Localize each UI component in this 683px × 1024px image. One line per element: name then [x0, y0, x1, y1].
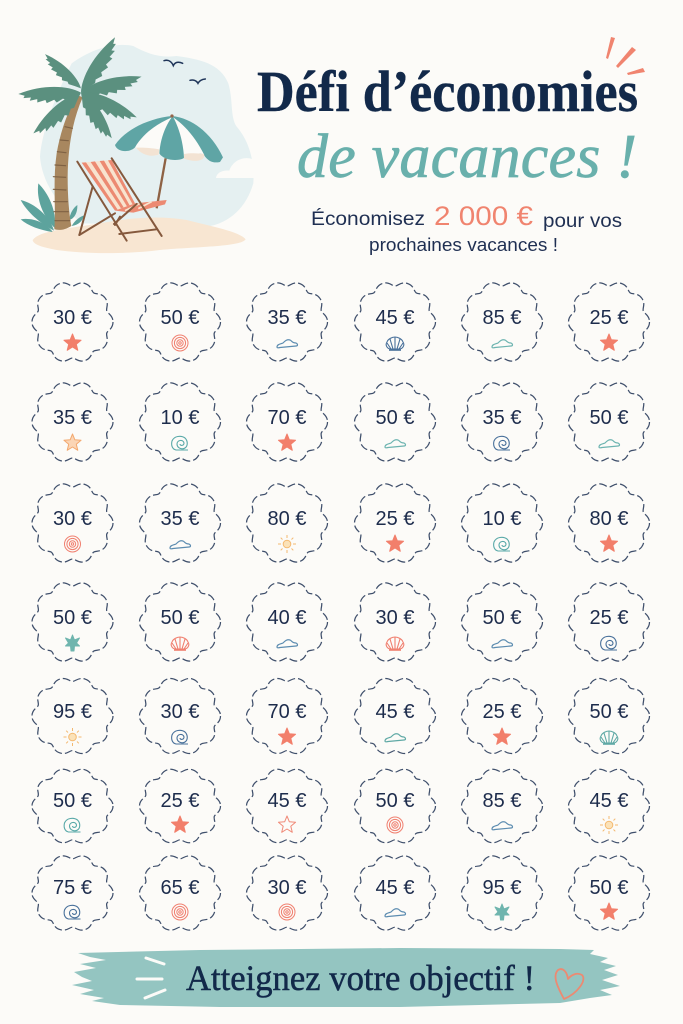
badge 10 €: 10 €	[483, 508, 521, 530]
badge 45 €	[354, 283, 436, 361]
badge 45 €: 45 €	[268, 790, 306, 812]
badge 10 €	[140, 383, 220, 461]
badge 25 €: 25 €	[590, 607, 628, 629]
subtitle	[311, 201, 622, 255]
badge 50 €	[140, 283, 220, 361]
badge 50 €	[354, 383, 436, 461]
icon: heart	[556, 969, 583, 999]
badge 45 €: 45 €	[376, 877, 414, 899]
badge 45 €	[246, 769, 328, 843]
umbrella pole	[157, 158, 166, 208]
badge 45 €: 45 €	[590, 790, 628, 812]
palm fronds	[18, 34, 144, 143]
badge 30 €	[354, 583, 436, 661]
badge 45 €	[354, 856, 436, 930]
sand	[33, 218, 246, 253]
savings grid	[32, 283, 650, 930]
badge 85 €: 85 €	[483, 307, 521, 329]
badge 25 €: 25 €	[590, 307, 628, 329]
badge 30 €: 30 €	[161, 701, 199, 723]
badge 85 €: 85 €	[483, 790, 521, 812]
badge 35 €	[32, 383, 113, 461]
badge 50 €: 50 €	[483, 607, 521, 629]
badge 80 €	[246, 484, 328, 562]
badge 25 €	[568, 583, 650, 661]
badge 25 €: 25 €	[483, 701, 521, 723]
badge 50 €	[462, 583, 542, 661]
badge 65 €: 65 €	[161, 877, 199, 899]
badge 50 €: 50 €	[161, 307, 199, 329]
badge 25 €	[462, 678, 542, 754]
sky blob	[40, 45, 254, 227]
badge 95 €	[32, 678, 113, 754]
badge 50 €	[568, 678, 650, 754]
badge 95 €: 95 €	[53, 701, 92, 723]
brush stroke	[72, 948, 620, 1007]
badge 85 €	[462, 769, 542, 843]
badge 30 €: 30 €	[53, 508, 92, 530]
badge 80 €: 80 €	[268, 508, 306, 530]
badge 95 €: 95 €	[483, 877, 521, 899]
badge 70 €	[246, 383, 328, 461]
subtitle line 2: prochaines vacances !	[369, 234, 558, 255]
badge 80 €: 80 €	[590, 508, 628, 530]
badge 50 €: 50 €	[590, 701, 628, 723]
badge 95 €	[462, 856, 542, 930]
badge 35 €: 35 €	[483, 407, 521, 429]
banner text: Atteignez votre objectif !	[186, 958, 535, 998]
badge 40 €	[246, 583, 328, 661]
title	[257, 59, 638, 191]
badge 35 €	[246, 283, 328, 361]
badge 50 €	[568, 383, 650, 461]
goal banner	[72, 948, 620, 1007]
subtitle word: Économisez	[311, 209, 425, 230]
badge 35 €: 35 €	[268, 307, 306, 329]
badge 25 €: 25 €	[376, 508, 414, 530]
badge 30 €: 30 €	[53, 307, 92, 329]
sparkle accent	[606, 37, 645, 75]
badge 50 €	[354, 769, 436, 843]
badge 10 €: 10 €	[161, 407, 199, 429]
badge 30 €	[246, 856, 328, 930]
badge 50 €: 50 €	[161, 607, 199, 629]
badge 45 €	[568, 769, 650, 843]
badge 45 €: 45 €	[376, 701, 414, 723]
badge 75 €	[32, 856, 113, 930]
badge 45 €: 45 €	[376, 307, 414, 329]
badge 50 €: 50 €	[53, 790, 92, 812]
deck chair	[77, 158, 167, 241]
badge 50 €	[568, 856, 650, 930]
badge 30 €	[32, 484, 113, 562]
heading line 2: de vacances !	[297, 123, 637, 191]
badge 50 €: 50 €	[590, 407, 628, 429]
white sparkle strokes	[137, 958, 165, 998]
badge 70 €: 70 €	[268, 701, 306, 723]
badge 35 €	[462, 383, 542, 461]
badge 50 €: 50 €	[590, 877, 628, 899]
badge 30 €	[32, 283, 113, 361]
badge 30 €: 30 €	[376, 607, 414, 629]
badge 30 €: 30 €	[268, 877, 306, 899]
badge 35 €: 35 €	[53, 407, 92, 429]
badge 80 €	[568, 484, 650, 562]
cloud	[216, 158, 254, 178]
badge 25 €	[354, 484, 436, 562]
badge 70 €: 70 €	[268, 407, 306, 429]
badge 10 €	[462, 484, 542, 562]
badge 75 €: 75 €	[53, 877, 92, 899]
subtitle word end: pour vos	[543, 211, 622, 232]
badge 40 €: 40 €	[268, 607, 306, 629]
badge 85 €	[462, 283, 542, 361]
badge 45 €	[354, 678, 436, 754]
badge 25 €: 25 €	[161, 790, 199, 812]
badge 50 €	[32, 769, 113, 843]
birds	[164, 60, 205, 83]
badge 35 €: 35 €	[161, 508, 199, 530]
badge 50 €	[32, 583, 113, 661]
palm trunk	[54, 95, 83, 230]
badge 70 €	[246, 678, 328, 754]
badge 35 €	[140, 484, 220, 562]
badge 50 €: 50 €	[376, 407, 414, 429]
illustration: beach scene	[18, 34, 254, 253]
badge 65 €	[140, 856, 220, 930]
heading line 1: Défi d’économies	[257, 59, 638, 124]
badge 30 €	[140, 678, 220, 754]
amount 2 000 €: 2 000 €	[434, 201, 533, 231]
badge 25 €	[140, 769, 220, 843]
badge 50 €: 50 €	[376, 790, 414, 812]
badge 25 €	[568, 283, 650, 361]
badge 50 €: 50 €	[53, 607, 92, 629]
plants	[21, 183, 84, 232]
umbrella canopy	[115, 114, 223, 162]
badge 50 €	[140, 583, 220, 661]
